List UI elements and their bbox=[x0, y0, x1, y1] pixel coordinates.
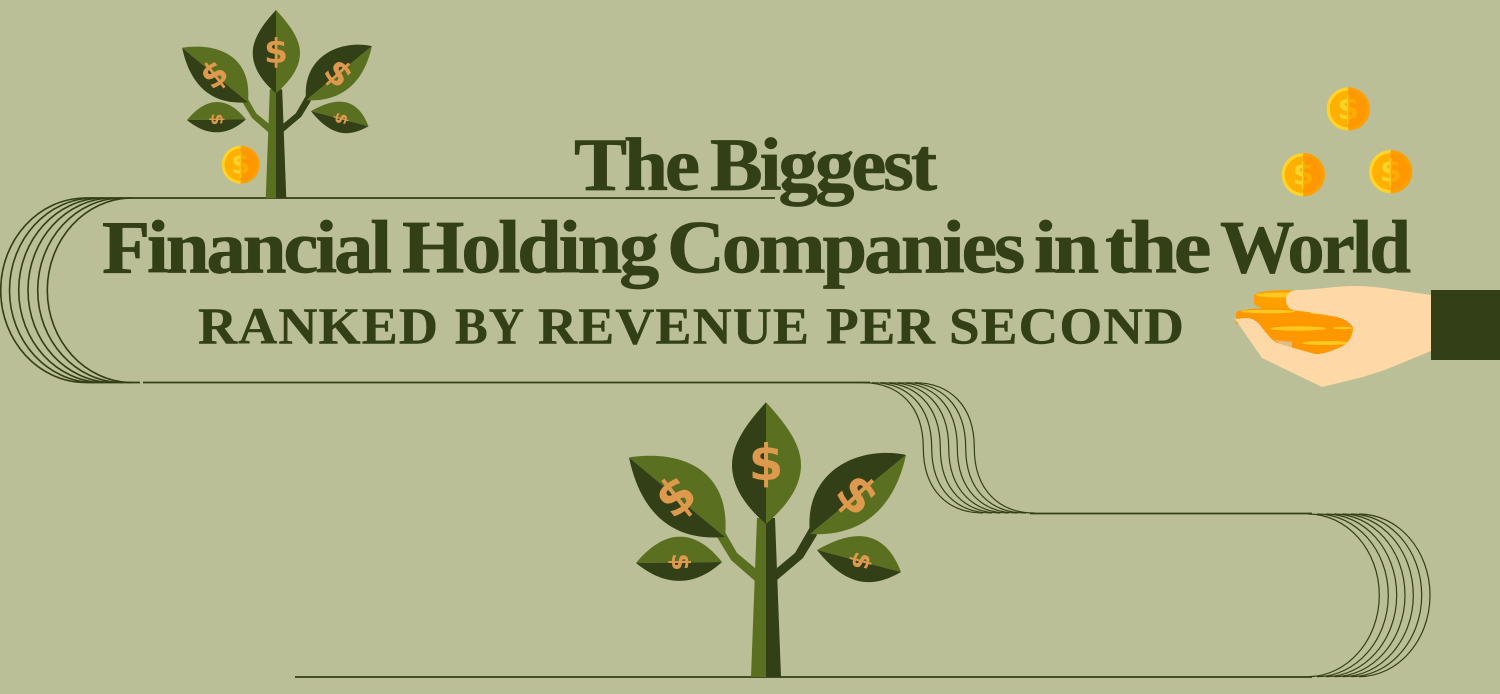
winding line: left loop bbox=[1, 198, 870, 382]
winding line: S curve bbox=[863, 383, 1034, 513]
icon: falling coin left: $ bbox=[1293, 157, 1314, 193]
title line 2: World bbox=[1220, 206, 1410, 290]
small plant, top left: $ bbox=[329, 110, 352, 127]
title line 1: The bbox=[574, 124, 699, 207]
title line 2: Holding bbox=[402, 206, 659, 290]
icon: falling coin left: $ bbox=[1293, 157, 1314, 193]
small plant, top left bbox=[182, 10, 372, 198]
title line 2: Companies bbox=[667, 206, 1024, 290]
title line 2: Financial bbox=[102, 206, 391, 290]
coins stack in palm bbox=[1236, 290, 1356, 356]
large plant, bottom centre bbox=[629, 402, 906, 677]
subtitle: RANKED bbox=[198, 298, 439, 355]
small plant, top left: $ bbox=[207, 113, 227, 125]
sleeve bbox=[1431, 290, 1500, 360]
icon: falling coin top: $ bbox=[1338, 91, 1359, 127]
title line 2: in bbox=[1034, 206, 1098, 290]
subtitle: SECOND bbox=[949, 298, 1185, 355]
subtitle: PER bbox=[826, 298, 936, 355]
large plant, bottom centre: $ bbox=[845, 549, 878, 573]
icon: falling coin right: $ bbox=[1380, 154, 1401, 190]
large plant, bottom centre: $ bbox=[824, 462, 891, 527]
large plant, bottom centre: $ bbox=[644, 463, 707, 530]
winding line: right loop and bottom run bbox=[295, 514, 1430, 677]
icon: falling coin top bbox=[1327, 87, 1370, 131]
hand bbox=[1235, 286, 1431, 387]
icon: falling coin left bbox=[1282, 153, 1325, 196]
icon: gold coin beside small plant: $ bbox=[231, 149, 250, 180]
small plant, top left: $ bbox=[193, 52, 236, 98]
title line 2: the bbox=[1105, 206, 1210, 290]
subtitle: REVENUE bbox=[538, 298, 810, 355]
large plant, bottom centre: $ bbox=[666, 553, 695, 571]
title line 1 bbox=[574, 124, 937, 207]
icon: falling coin right: $ bbox=[1380, 154, 1401, 190]
title line 2 bbox=[102, 206, 1410, 290]
icon: falling coin right bbox=[1369, 150, 1412, 193]
icon: falling coin top: $ bbox=[1338, 91, 1359, 127]
small plant, top left: $ bbox=[264, 32, 288, 72]
icon: hand holding coins bbox=[1235, 286, 1500, 387]
title line 1: Biggest bbox=[710, 124, 937, 207]
icon: gold coin beside small plant bbox=[222, 146, 260, 184]
subtitle: BY bbox=[455, 298, 525, 355]
large plant, bottom centre: $ bbox=[749, 434, 783, 492]
icon: gold coin beside small plant: $ bbox=[231, 149, 250, 180]
subtitle bbox=[198, 298, 1185, 355]
small plant, top left: $ bbox=[315, 51, 361, 96]
